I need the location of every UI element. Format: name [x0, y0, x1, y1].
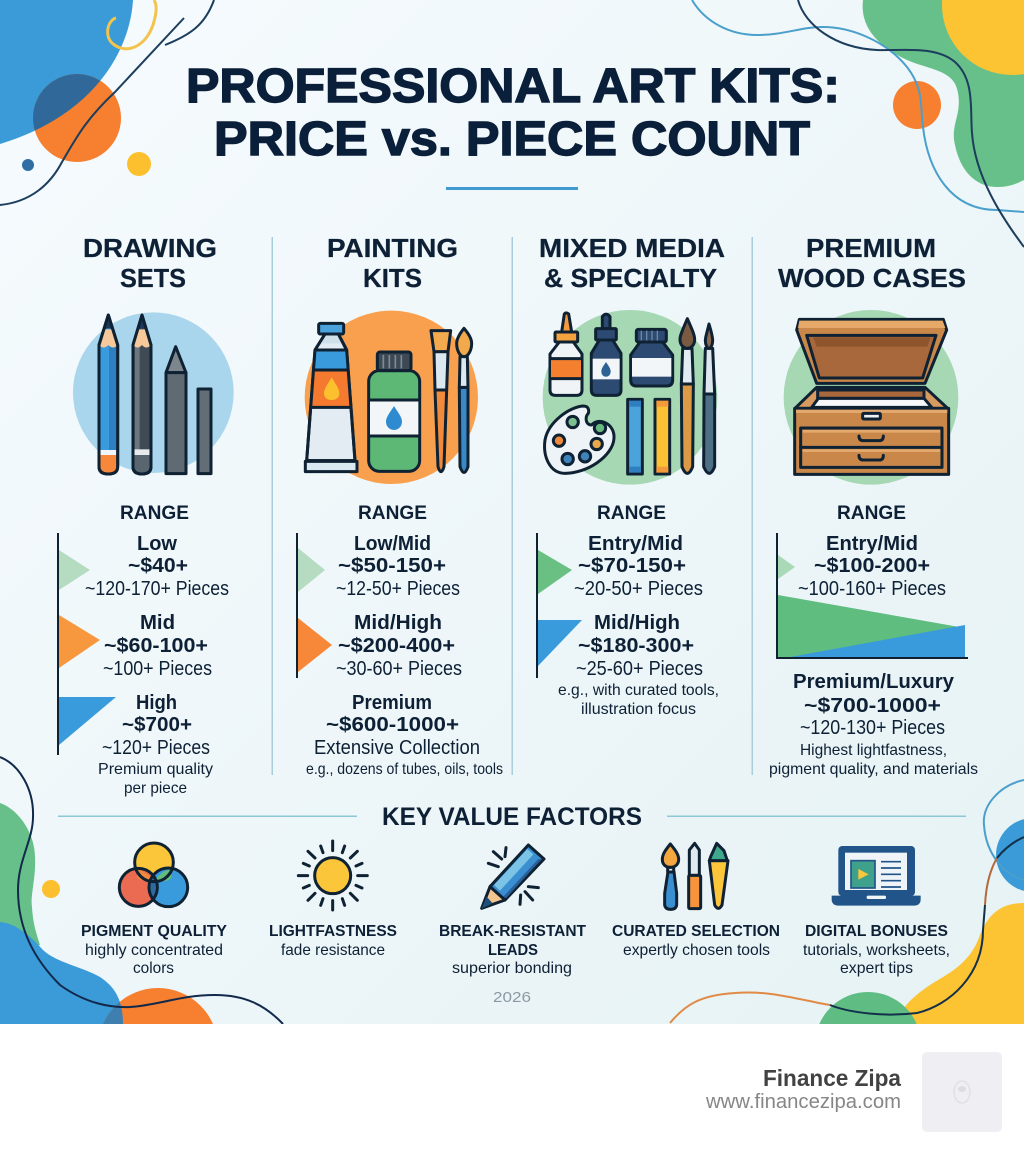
icon: colour venn	[119, 843, 188, 907]
heading: drawing sets	[83, 233, 217, 293]
price range: premium wood cases	[769, 503, 978, 778]
decor: bottom-right shapes	[669, 779, 1024, 1024]
price range: painting kits: Premium	[352, 691, 432, 714]
price range: mixed media: ~$70-150+	[578, 554, 686, 577]
price range: drawing sets: Premium quality	[98, 761, 213, 778]
icon: pencil	[482, 845, 544, 908]
price range: painting kits: Extensive Collection	[314, 737, 480, 759]
price range: mixed media: ~20-50+ Pieces	[574, 578, 703, 600]
heading: painting kits	[327, 233, 458, 293]
price range: premium wood cases: pigment quality, and materials	[769, 761, 978, 778]
panel: premium wood cases	[769, 233, 978, 778]
price range: mixed media: illustration focus	[581, 701, 696, 718]
price range: drawing sets: Low	[137, 532, 177, 555]
factor: pigment quality: colors	[133, 960, 174, 977]
icon: pencils and charcoal	[73, 312, 234, 474]
heading: drawing sets: SETS	[120, 263, 186, 293]
heading: mixed media	[539, 233, 725, 293]
price range: drawing sets: ~120+ Pieces	[102, 737, 210, 759]
price range: drawing sets: ~100+ Pieces	[103, 658, 212, 680]
factor: pigment quality	[81, 843, 227, 977]
price range: mixed media: ~25-60+ Pieces	[576, 658, 703, 680]
price range: mixed media: e.g., with curated tools,	[558, 682, 719, 699]
factor: curated selection: CURATED SELECTION	[612, 923, 780, 940]
price range: premium wood cases: Entry/Mid	[826, 532, 918, 555]
icon: bottles, palette and brushes	[543, 310, 717, 485]
heading: key value factors: KEY VALUE FACTORS	[382, 803, 642, 831]
price range: premium wood cases: Premium/Luxury	[793, 670, 955, 693]
price range: drawing sets: High	[136, 691, 177, 714]
heading: premium wood cases: WOOD CASES	[778, 263, 966, 293]
icon: brush, pen and marker	[662, 843, 728, 909]
price range: painting kits: Mid/High	[354, 611, 442, 634]
decor: top-left shapes	[0, 0, 214, 205]
heading: premium wood cases	[778, 233, 966, 293]
factor: pigment quality: PIGMENT QUALITY	[81, 923, 227, 940]
factor: break-resistant leads: LEADS	[488, 942, 538, 959]
price range: drawing sets: ~$700+	[122, 713, 192, 736]
price range: painting kits: ~12-50+ Pieces	[336, 578, 460, 600]
column dividers	[272, 237, 753, 775]
factor: break-resistant leads: BREAK-RESISTANT	[439, 923, 586, 940]
factor: lightfastness	[269, 841, 397, 959]
factor: digital bonuses: DIGITAL BONUSES	[805, 923, 948, 940]
icon: paint tube, bottle and brushes	[305, 311, 478, 484]
price range: mixed media: ~$180-300+	[578, 634, 694, 657]
year label: 2026	[493, 989, 531, 1006]
price range: drawing sets	[57, 503, 229, 797]
price range: painting kits: ~$600-1000+	[326, 713, 459, 736]
decor: top-right shapes	[692, 0, 1024, 247]
price range: painting kits: ~$50-150+	[338, 554, 446, 577]
factor: lightfastness: LIGHTFASTNESS	[269, 923, 397, 940]
title: PRICE vs. PIECE COUNT	[214, 113, 810, 166]
price range: drawing sets: per piece	[124, 780, 187, 797]
footer logo	[922, 1052, 1002, 1132]
factor: curated selection	[612, 843, 780, 959]
heading: mixed media: MIXED MEDIA	[539, 233, 725, 263]
price range: mixed media: Mid/High	[594, 611, 680, 634]
price range: premium wood cases: ~120-130+ Pieces	[800, 717, 945, 739]
title: PROFESSIONAL ART KITS:	[186, 60, 840, 113]
panel: mixed media and specialty	[536, 233, 725, 718]
title	[186, 60, 840, 166]
price range: premium wood cases: ~$700-1000+	[804, 694, 941, 717]
price range: premium wood cases: Highest lightfastness,	[800, 742, 947, 759]
factor: lightfastness: fade resistance	[281, 942, 385, 959]
panel: painting kits	[296, 233, 503, 778]
price range: painting kits: ~$200-400+	[338, 634, 455, 657]
heading: drawing sets: DRAWING	[83, 233, 217, 263]
icon: sun	[298, 841, 367, 910]
factor: break-resistant leads: superior bonding	[452, 960, 572, 977]
price range: premium wood cases: ~$100-200+	[814, 554, 930, 577]
price range: painting kits	[296, 503, 503, 778]
price range: drawing sets: ~$40+	[128, 554, 188, 577]
price range: mixed media	[536, 503, 719, 718]
price range: painting kits: e.g., dozens of tubes, oils, tools	[306, 761, 503, 778]
heading: mixed media: & SPECIALTY	[544, 263, 717, 293]
price range: drawing sets: Mid	[140, 611, 175, 634]
price range: painting kits: ~30-60+ Pieces	[336, 658, 462, 680]
heading: painting kits: PAINTING	[327, 233, 458, 263]
footer url: www.financezipa.com	[705, 1091, 901, 1113]
factor: digital bonuses	[803, 846, 950, 977]
price range: mixed media: RANGE	[597, 503, 666, 524]
price range: mixed media: Entry/Mid	[588, 532, 683, 555]
footer	[0, 1024, 1024, 1154]
factor: digital bonuses: tutorials, worksheets,	[803, 942, 950, 959]
heading: painting kits: KITS	[363, 263, 422, 293]
factor: digital bonuses: expert tips	[840, 960, 913, 977]
factor: pigment quality: highly concentrated	[85, 942, 223, 959]
price range: drawing sets: RANGE	[120, 503, 189, 524]
price range: drawing sets: ~120-170+ Pieces	[85, 578, 229, 600]
decor: bottom-left shapes	[0, 756, 284, 1024]
icon: laptop with video	[832, 846, 921, 906]
price range: painting kits: Low/Mid	[354, 532, 431, 555]
panel: drawing sets	[57, 233, 234, 797]
price range: painting kits: RANGE	[358, 503, 427, 524]
icon: open wooden case	[784, 310, 958, 485]
heading: premium wood cases: PREMIUM	[806, 233, 936, 263]
price range: drawing sets: ~$60-100+	[104, 634, 208, 657]
factor: break-resistant leads	[439, 845, 586, 977]
price range: premium wood cases: ~100-160+ Pieces	[798, 578, 946, 600]
price range: premium wood cases: RANGE	[837, 503, 906, 524]
factor: curated selection: expertly chosen tools	[623, 942, 770, 959]
footer brand name: Finance Zipa	[763, 1065, 901, 1091]
